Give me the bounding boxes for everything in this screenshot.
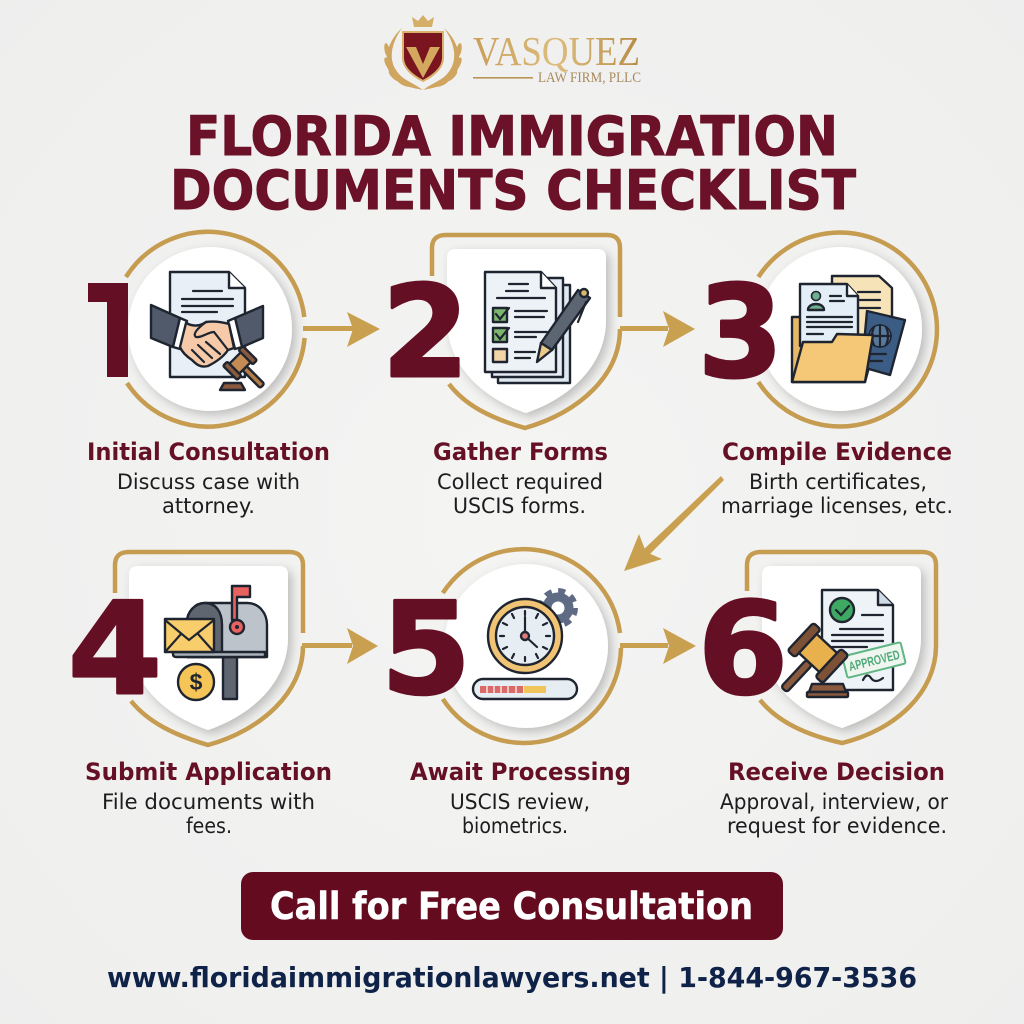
arrow 2 to 3 — [620, 311, 695, 347]
logo laurel wreath — [383, 28, 463, 90]
step 5 description: USCIS review, — [450, 790, 590, 814]
white circle panel — [128, 247, 292, 411]
gold shield outline — [747, 552, 936, 743]
title: FLORIDA IMMIGRATION — [186, 105, 838, 168]
logo crown — [412, 15, 434, 27]
step 2 description: Collect required — [437, 470, 603, 494]
gavel — [766, 623, 849, 706]
white shield panel — [129, 566, 288, 730]
step 1 description — [117, 470, 300, 518]
step 1 description: attorney. — [162, 494, 255, 518]
number 5: 5 — [381, 575, 471, 723]
step 3 description: marriage licenses, etc. — [721, 494, 953, 518]
number 6: 6 — [698, 575, 788, 723]
step 4 description: fees. — [186, 814, 232, 838]
icon: mailbox, envelope and coin — [165, 586, 267, 700]
step 4: Submit Application — [68, 552, 303, 745]
icon: stopwatch, gear and progress bar — [473, 591, 577, 699]
gold shield outline — [115, 552, 303, 745]
icon: contract, handshake and gavel — [151, 272, 273, 396]
number 3: 3 — [698, 258, 783, 406]
number 1: 1 — [82, 259, 154, 407]
number 1 — [88, 283, 128, 377]
title — [170, 105, 856, 222]
step 2 description: USCIS forms. — [453, 494, 586, 518]
white shield panel — [762, 566, 921, 728]
logo shield — [403, 32, 443, 81]
step 5 heading: Await Processing — [410, 758, 631, 786]
arrow 1 to 2 — [303, 312, 380, 347]
step 1 description: Discuss case with — [117, 470, 300, 494]
step 3 description: Birth certificates, — [749, 470, 927, 494]
website and phone footer: www.floridaimmigrationlawyers.net | 1-844-967-3536 — [107, 961, 917, 994]
step 2: Gather Forms — [382, 235, 620, 428]
diagonal arrow 3 to 5 — [624, 476, 724, 571]
logo: Vasquez Law Firm — [383, 15, 641, 90]
step 3 description — [721, 470, 953, 518]
dollar sign on coin: $ — [190, 669, 203, 695]
step 3: Compile Evidence — [698, 232, 937, 426]
call to action button: Call for Free Consultation — [270, 885, 753, 928]
call to action button — [241, 872, 783, 940]
step 3 heading: Compile Evidence — [722, 438, 952, 466]
gold ring — [443, 549, 621, 743]
step 1 heading: Initial Consultation — [87, 438, 330, 466]
gold shield outline — [432, 235, 620, 428]
step 6: Receive Decision — [698, 552, 936, 743]
icon: folder, passport and certificates — [792, 276, 905, 382]
gold ring — [126, 232, 305, 427]
number 4: 4 — [68, 575, 162, 723]
white circle panel — [758, 247, 922, 411]
step 4 description — [102, 790, 315, 838]
step 1: Initial Consultation — [82, 232, 305, 427]
step 6 description: Approval, interview, or — [720, 790, 948, 814]
white circle panel — [444, 564, 608, 728]
logo V mark — [406, 47, 440, 78]
icon: forms with checklist and pen — [485, 272, 590, 383]
arrow 5 to 6 — [620, 628, 696, 664]
step 4 description: File documents with — [102, 790, 315, 814]
step 5: Await Processing — [381, 549, 621, 743]
logo wordmark: VASQUEZ — [473, 28, 640, 74]
step 5 description: biometrics. — [462, 814, 568, 838]
step 5 description — [450, 790, 590, 838]
logo tagline: LAW FIRM, PLLC — [538, 70, 641, 86]
approved stamp: APPROVED — [847, 647, 901, 674]
white shield panel — [447, 249, 606, 413]
step 6 description — [720, 790, 948, 838]
number 2: 2 — [382, 258, 469, 406]
gold ring — [758, 232, 937, 426]
arrow 4 to 5 — [302, 628, 378, 664]
step 6 description: request for evidence. — [727, 814, 947, 838]
title: DOCUMENTS CHECKLIST — [170, 159, 856, 222]
icon: approved document and gavel — [766, 590, 906, 706]
step 2 heading: Gather Forms — [433, 438, 608, 466]
step 4 heading: Submit Application — [85, 758, 332, 786]
step 2 description — [437, 470, 603, 518]
step 6 heading: Receive Decision — [728, 758, 945, 786]
